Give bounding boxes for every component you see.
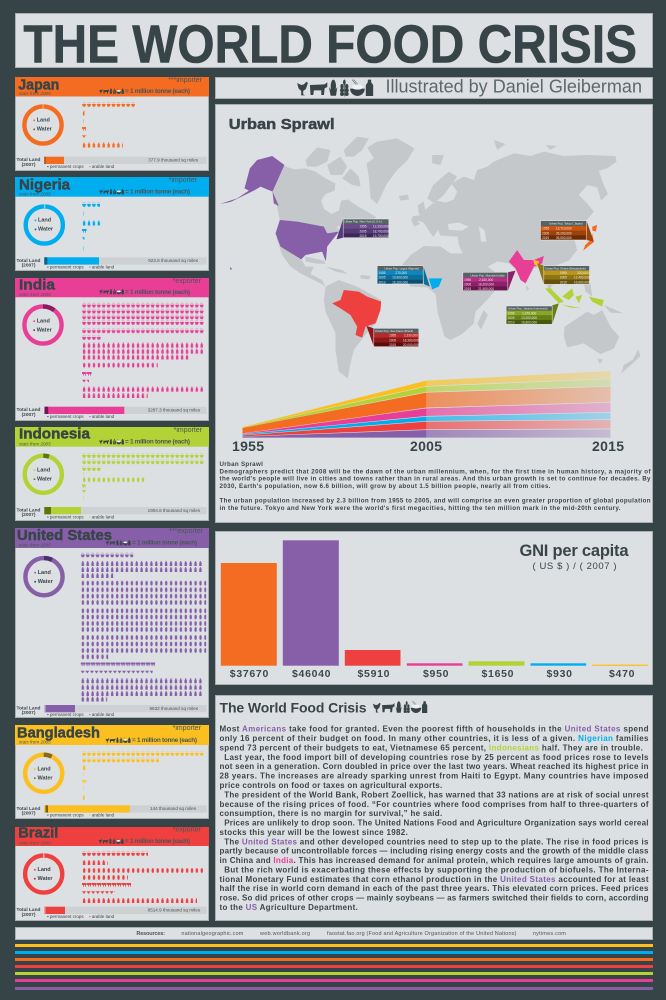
Brazil land bar: 8514.9 thousand sq miles: [148, 908, 201, 913]
urban sprawl text: the world's people will live in cities and towns rather than in rural areas. And this urban growth is set to continue for decades. By: [219, 476, 651, 483]
colour stripes footer: [15, 944, 653, 990]
panel: resources: [15, 927, 653, 940]
United States header: = 1 million tonne (each): [132, 540, 197, 546]
callout: Mumbai: 21,900,000: [478, 287, 494, 291]
United States header: stats from 2005: [19, 542, 51, 548]
United States land bar: 9632 thousand sq miles: [149, 706, 199, 711]
callout: Sao Paulo: 2005: [389, 338, 396, 342]
urban sprawl text: in the future. Tokyo and New York were the world's first megacities, hitting the ten million mark in the mid-20th century.: [219, 505, 620, 512]
Indonesia donut: Water: [37, 476, 53, 482]
urban sprawl text: Urban Sprawl: [219, 461, 263, 468]
axis label: 2005: 2005: [410, 438, 442, 454]
bar labels: $930: [546, 668, 572, 680]
panel: resources: nationalgeographic.com: [181, 931, 244, 937]
Indonesia header: [15, 426, 209, 447]
callout: Tokyo: 35,500,000: [555, 236, 571, 240]
country: Nigeria: [428, 278, 442, 289]
article text: Most Americans take food for granted. Even the poorest fifth of households in the United States spend: [219, 725, 648, 734]
India donut: Water: [37, 328, 53, 334]
callout: Jakarta: 16,800,000: [521, 321, 537, 325]
callout: Mumbai: 2015: [464, 287, 471, 291]
Bangladesh header: *importer: [173, 725, 202, 732]
callout: New York: 2005: [359, 229, 366, 233]
bar labels: $470: [608, 668, 634, 680]
United States food pictograms: [81, 552, 206, 702]
Nigeria land bar: 923.8 thousand sq miles: [148, 258, 199, 263]
callout: Lagos: 270,000: [395, 271, 407, 275]
Indonesia land bar: ▪ permanent crops: [47, 514, 84, 519]
Japan header: ***importer: [168, 77, 203, 84]
callout: Tokyo: 13,710,000: [555, 227, 571, 231]
article text: partly because of uncontrollable forces — including rising energy costs and the growth of the middle class: [219, 847, 649, 856]
callout: Tokyo: 1955: [542, 227, 549, 231]
Brazil land bar: [17, 907, 207, 919]
callout: Sao Paulo: [366, 326, 418, 347]
callout: Sao Paulo: 20,000,000: [402, 343, 418, 347]
India food pictograms: [82, 303, 204, 398]
Bangladesh land bar: Total Land: [17, 806, 41, 812]
panel: resources: faostat.fao.org (Food and Agriculture Organization of the United Nations): [327, 931, 517, 937]
Indonesia land bar: [17, 507, 207, 519]
article text: stocks this year will be the lowest since 1982.: [219, 828, 407, 837]
Bangladesh header: [15, 724, 209, 745]
United States land bar: ▪ arable land: [89, 712, 115, 717]
Indonesia land bar: ▪ arable land: [89, 514, 115, 519]
bar labels: [229, 668, 634, 680]
Bangladesh land bar: ▪ permanent crops: [47, 813, 84, 818]
callout: Mumbai: Urban Pop. Mumbai (India): [470, 273, 504, 277]
Bangladesh land bar: [17, 805, 207, 818]
Japan land bar: ▪ permanent crops: [47, 164, 84, 169]
callout: Jakarta: 1955: [507, 311, 514, 315]
Indonesia land bar: Total Land: [17, 508, 41, 514]
India land bar: ▪ arable land: [89, 414, 115, 419]
callout: Tokyo: [540, 221, 593, 242]
callout: Dhaka: [537, 263, 589, 284]
panel: The World Food Crisis article: [214, 695, 653, 921]
Nigeria donut: [26, 204, 63, 244]
Indonesia donut: [25, 456, 62, 493]
Brazil donut: [25, 853, 62, 893]
article text: rose. So did prices of other crops — mainly soybeans — as farmers switched their fields to corn, according: [219, 894, 648, 903]
article text: because of the rising prices of food. “For countries where food comprises from half to three-quarters of: [219, 800, 648, 809]
urban sprawl text: [219, 461, 651, 512]
Bangladesh land bar: 144 thousand sq miles: [150, 806, 197, 811]
United States donut: [25, 558, 63, 595]
India header: = 1 million tonne (each): [125, 289, 190, 296]
article heading: The World Food Crisis: [219, 700, 366, 716]
callout: Jakarta: 2010: [507, 321, 514, 325]
Japan food pictograms: [82, 102, 135, 148]
United States land bar: Total Land: [17, 706, 41, 712]
article text: Prices are unlikely to drop soon. The United Nations Food and Agriculture Organization says world cereal: [224, 818, 648, 828]
Brazil header: [15, 825, 209, 846]
article text: The United States and other developed countries need to step up to the plate. The rise in food prices is: [224, 837, 649, 846]
Bangladesh donut: Water: [38, 776, 53, 782]
urban sprawl text: Demographers predict that 2008 will be the dawn of the urban millennium, when, for the first time in human history, a majority of: [219, 468, 651, 475]
Indonesia food pictograms: [82, 453, 204, 500]
bar labels: $5910: [357, 668, 389, 680]
United States land bar: (2007): [22, 710, 36, 716]
callout: Tokyo: Urban Pop. Tokyo ( Japan): [549, 222, 582, 226]
country: United States: [219, 156, 338, 270]
Nigeria header: [15, 176, 209, 197]
callout: Mumbai: 1955: [464, 278, 471, 282]
panel: resources: web.worldbank.org: [259, 931, 310, 937]
byline banner: [214, 77, 653, 99]
Brazil land bar: (2007): [22, 912, 36, 918]
bar labels: $950: [422, 668, 448, 680]
panel: GNI per capita: [214, 531, 653, 685]
Bangladesh donut: [25, 755, 62, 792]
callout: Jakarta: 13,200,000: [521, 316, 537, 320]
country: Bangladesh: [533, 260, 538, 266]
callout: Tokyo: 35,200,000: [555, 231, 571, 235]
callout: Mumbai: 18,200,000: [478, 282, 494, 286]
Indonesia header: = 1 million tonne (each): [125, 438, 190, 446]
article text: to the US Agriculture Department.: [219, 903, 357, 912]
India land bar: (2007): [22, 412, 36, 418]
Brazil header: stats from 2005: [19, 840, 51, 846]
panel: resources: nytimes.com: [533, 931, 566, 937]
United States donut: Water: [38, 579, 54, 585]
callout: Dhaka: 2005: [559, 276, 567, 280]
article text: only 16 percent of their budget on food. In many other countries, it is less of a given. Nigerian families: [219, 734, 649, 743]
icon: food row: [297, 80, 373, 96]
callout: Jakarta: Urban Pop. Jakarta (Indonesia): [508, 307, 547, 311]
article text: not seen in a generation. Corn doubled in price over the last two years. Wheat reached its highest price in: [219, 762, 648, 771]
Indonesia header: *importer: [174, 427, 203, 434]
subheading: ( US $ ) / ( 2007 ): [532, 561, 616, 572]
Nigeria header: *importer: [169, 177, 198, 184]
callout: Mumbai: 2005: [464, 282, 471, 286]
callout: Dhaka: 2015: [559, 280, 567, 284]
callout: Lagos: 1955: [378, 271, 385, 275]
Bangladesh donut: Land: [38, 766, 51, 772]
callout: Dhaka: 16,800,000: [573, 280, 589, 284]
India header: stats from 2005: [19, 292, 51, 297]
Japan donut: Land: [37, 118, 50, 124]
Nigeria land bar: ▪ permanent crops: [47, 265, 84, 270]
India land bar: Total Land: [17, 407, 41, 413]
callout: Sao Paulo: Urban Pop. Sao Paulo (Brazil): [375, 329, 413, 333]
article text: tional Monetary Fund estimates that corn ethanol production in the United States accounted for at least: [219, 875, 648, 884]
callout: Mumbai: 2,620,000: [479, 278, 493, 282]
United States header: ***exporter: [169, 528, 204, 535]
grey continents: [272, 137, 640, 378]
callout: Sao Paulo: 2015: [389, 343, 396, 347]
callout: Lagos: 2010: [378, 280, 385, 284]
Indonesia header: stats from 2005: [19, 441, 51, 446]
article text: But the rich world is exacerbating these effects by supporting the production of biofuels. The Interna-: [224, 866, 648, 874]
Indonesia donut: Land: [37, 468, 50, 474]
India land bar: ▪ permanent crops: [47, 414, 84, 419]
Bangladesh food pictograms: [82, 751, 204, 800]
Brazil land bar: Total Land: [17, 907, 41, 913]
callout: New York: 19,700,000: [372, 234, 388, 238]
urban sprawl text: The urban population increased by 2.3 billion from 1955 to 2005, and will comprise an even greater proportion of global population: [219, 498, 650, 505]
Japan donut: [24, 104, 62, 144]
callout: Lagos: 10,900,000: [392, 276, 408, 280]
Bangladesh header: stats from 2005: [19, 740, 51, 744]
callout: New York: [336, 219, 388, 239]
callout: New York: 2015: [359, 234, 366, 238]
callout: Sao Paulo: 18,300,000: [402, 338, 418, 342]
article text: The president of the World Bank, Robert Zoellick, has warned that 33 nations are at risk of social unrest: [224, 790, 648, 799]
Nigeria header: = 1 million tonne (each): [125, 188, 190, 196]
callout: Lagos: [377, 266, 429, 287]
callout: New York: 12,330,000: [372, 225, 388, 229]
article text: consumption, there is no margin for survival,” he said.: [219, 809, 442, 818]
panel: Urban Sprawl: [214, 104, 653, 523]
Nigeria donut: Water: [38, 227, 54, 233]
Nigeria land bar: ▪ arable land: [89, 265, 115, 270]
callout: New York: 18,700,000: [372, 229, 388, 233]
article text: Last year, the food import bill of developing countries rose by 25 percent as food prices rose to levels: [224, 753, 649, 762]
callout: Jakarta: 1,370,000: [522, 311, 536, 315]
panel: United States: [15, 528, 209, 718]
Brazil food pictograms: [82, 851, 204, 903]
Brazil header: = 1 million tonne (each): [125, 838, 190, 845]
Nigeria food pictograms: [82, 202, 101, 251]
panel: Nigeria: [15, 177, 209, 271]
United States donut: Land: [38, 570, 51, 576]
Japan header: [15, 76, 209, 96]
callout: Lagos: Urban Pop. Lagos (Nigeria): [384, 266, 418, 270]
callout: Dhaka: Urban Pop. Dhaka (Bangladesh): [545, 266, 586, 270]
callout: Sao Paulo: 2,330,000: [403, 334, 418, 338]
Japan header: stats from 2005: [19, 91, 51, 96]
country: Indonesia: [544, 288, 603, 308]
country: Japan: [583, 225, 597, 251]
India land bar: [17, 407, 207, 419]
Nigeria land bar: [17, 257, 207, 270]
callout: New York: 1955: [359, 225, 366, 229]
urban sprawl text: 2030, Earth's population, now 6.6 billion, will grow by about 1.5 billion people, nearly all from cities.: [219, 483, 550, 490]
Japan donut: Water: [37, 127, 53, 133]
article text: 28 years. The increases are already sparking unrest from Haiti to Egypt. Many countries have imposed: [219, 772, 648, 781]
inland seas: [323, 203, 486, 242]
Japan land bar: (2007): [22, 162, 36, 168]
highlighted countries: [219, 156, 603, 338]
country: Brazil: [332, 290, 381, 338]
Nigeria land bar: Total Land: [17, 258, 41, 264]
country: India: [508, 250, 543, 283]
world map: [219, 137, 640, 438]
Brazil land bar: ▪ arable land: [89, 914, 115, 919]
callout: Jakarta: 2005: [507, 316, 514, 320]
icon: food row small: [372, 701, 427, 713]
callout: Tokyo: 2005: [542, 231, 549, 235]
Japan land bar: Total Land: [17, 157, 41, 163]
Brazil land bar: ▪ permanent crops: [47, 914, 84, 919]
India donut: [24, 306, 62, 344]
callout: Dhaka: 1955: [559, 271, 567, 275]
Indonesia land bar: (2007): [22, 512, 36, 518]
Nigeria land bar: (2007): [22, 262, 36, 268]
United States land bar: [17, 705, 207, 717]
panel: Brazil: [15, 827, 209, 921]
India header: *exporter: [173, 278, 202, 285]
bar labels: $1650: [481, 668, 513, 680]
bar chart: [220, 540, 648, 666]
article text: spend 73 percent of their budgets to eat, Vietnamese 65 percent, Indonesians half. They are in trouble.: [219, 744, 642, 752]
callout: Tokyo: 2015: [542, 236, 549, 240]
panel: Indonesia: [15, 427, 209, 521]
urban population stream chart: [242, 368, 610, 438]
Nigeria donut: Land: [38, 218, 51, 224]
callout: Mumbai: [462, 271, 515, 291]
Japan header: = 1 million tonne (each): [125, 88, 190, 95]
heading: GNI per capita: GNI per capita: [519, 542, 629, 560]
callout: Dhaka: 320,000: [577, 271, 588, 275]
bar labels: $46040: [292, 668, 330, 680]
callout: Dhaka: 12,400,000: [573, 276, 589, 280]
Bangladesh land bar: ▪ arable land: [89, 813, 115, 818]
Indonesia land bar: 1904.6 thousand sq miles: [148, 508, 201, 513]
article text: half the rise in world corn demand in each of the past three years. This elevated corn prices. Feed prices: [219, 884, 649, 893]
United States header: [15, 527, 209, 548]
bar labels: $37670: [229, 668, 268, 680]
callout: Jakarta: [506, 303, 558, 325]
heading: Urban Sprawl: Urban Sprawl: [228, 116, 334, 133]
Bangladesh header: = 1 million tonne (each): [132, 737, 197, 744]
Japan land bar: 377.9 thousand sq miles: [148, 158, 199, 163]
article text: [219, 725, 649, 912]
callout: New York: Urban Pop. New York (U.S.A.): [344, 220, 382, 224]
panel: resources: Resources:: [136, 931, 165, 937]
axis label: 2015: 2015: [592, 438, 624, 454]
Nigeria header: stats from 2005: [19, 191, 51, 196]
callout: Lagos: 2005: [378, 276, 385, 280]
Bangladesh land bar: (2007): [22, 810, 36, 816]
Japan land bar: [17, 157, 207, 169]
axis label: 1955: 1955: [232, 438, 264, 454]
Brazil donut: Land: [38, 867, 51, 873]
India land bar: 3287.3 thousand sq miles: [148, 408, 201, 413]
Japan land bar: ▪ arable land: [89, 164, 115, 169]
panel: India: [15, 278, 209, 421]
India header: [15, 276, 209, 297]
panel: Japan: [15, 77, 209, 171]
callout: Sao Paulo: 1955: [389, 334, 396, 338]
India donut: Land: [37, 318, 50, 324]
article text: in China and India. This has increased demand for animal protein, which requires large amounts of grain.: [219, 856, 648, 865]
panel: Bangladesh: [15, 725, 209, 819]
United States land bar: ▪ permanent crops: [47, 712, 84, 717]
Brazil donut: Water: [38, 876, 53, 882]
article text: price controls on food or taxes on agricultural exports.: [219, 781, 442, 790]
callout: Lagos: 16,100,000: [392, 280, 408, 284]
